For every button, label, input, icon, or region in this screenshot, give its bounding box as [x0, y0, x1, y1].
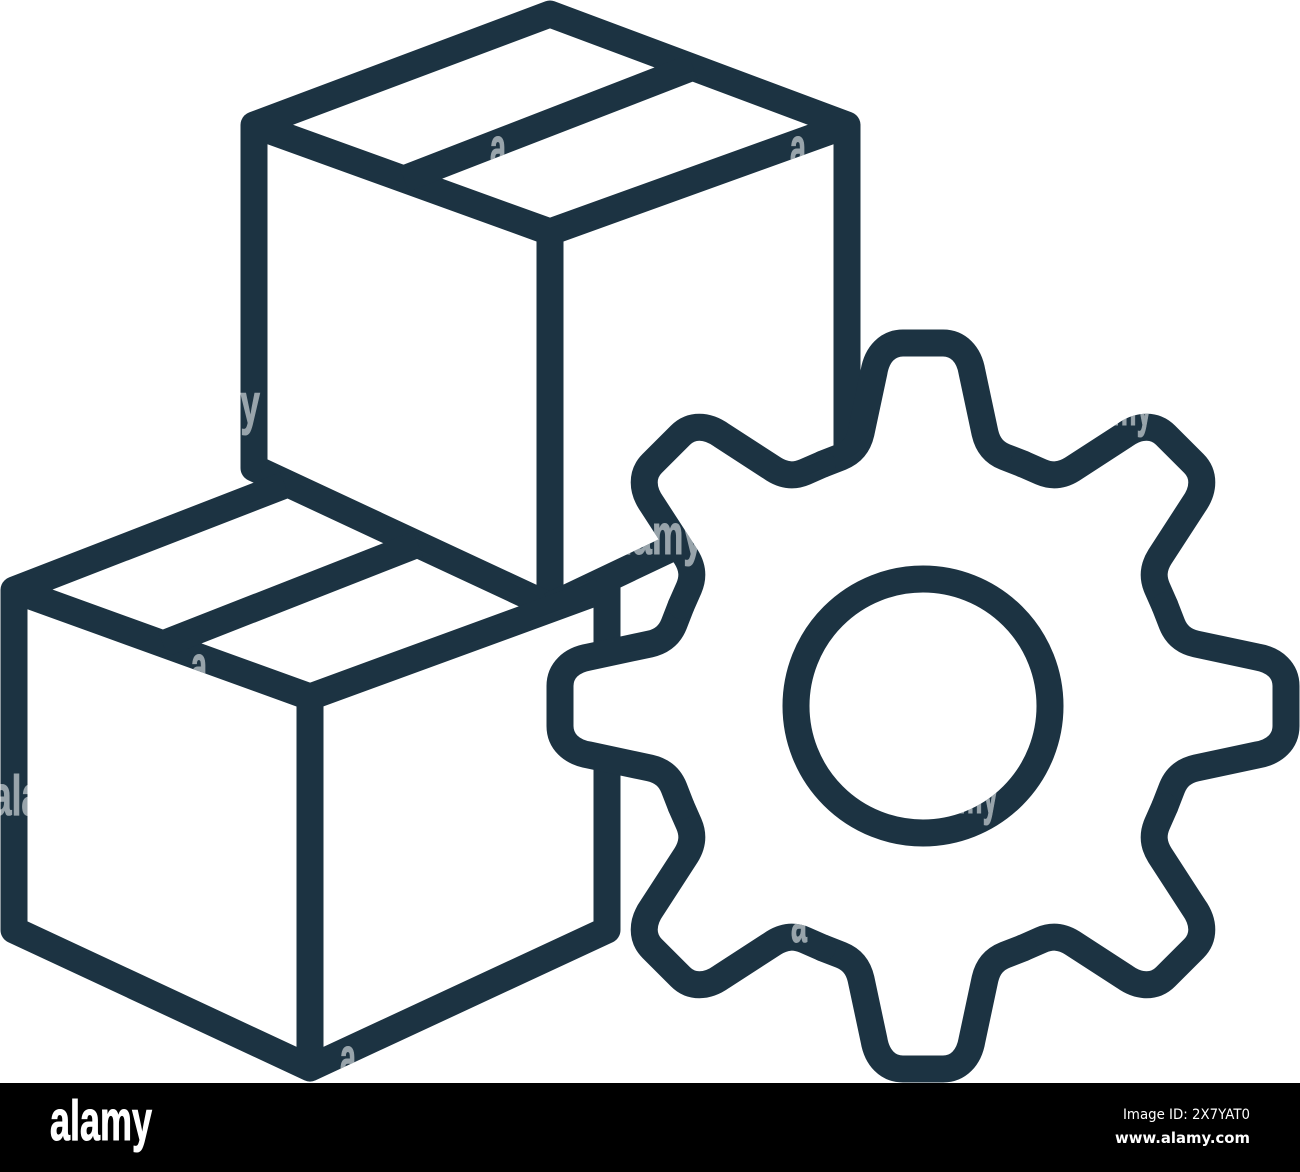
- footer bar: [0, 1083, 1300, 1172]
- icon: gear: [560, 343, 1286, 1069]
- watermark fragments: a: [340, 1026, 357, 1090]
- watermark fragments: my: [958, 762, 998, 826]
- icon: upper cardboard box: [254, 14, 847, 606]
- image id: Image ID: 2X7YAT0: [1123, 1107, 1250, 1123]
- footer logo: alamy: [50, 1089, 152, 1153]
- watermark fragments: alamy: [160, 372, 260, 436]
- icon: lower cardboard box: [14, 485, 607, 1068]
- website url: www.alamy.com: [1115, 1129, 1250, 1147]
- illustration: boxes and gear with footer: my: [1112, 374, 1152, 438]
- watermark fragments: a: [790, 116, 807, 180]
- watermark fragments: a: [191, 634, 208, 698]
- watermark fragments: a: [791, 891, 808, 955]
- watermark fragments: [0, 116, 1152, 1090]
- watermark fragments: alamy: [603, 503, 703, 567]
- watermark fragments: a: [490, 116, 507, 180]
